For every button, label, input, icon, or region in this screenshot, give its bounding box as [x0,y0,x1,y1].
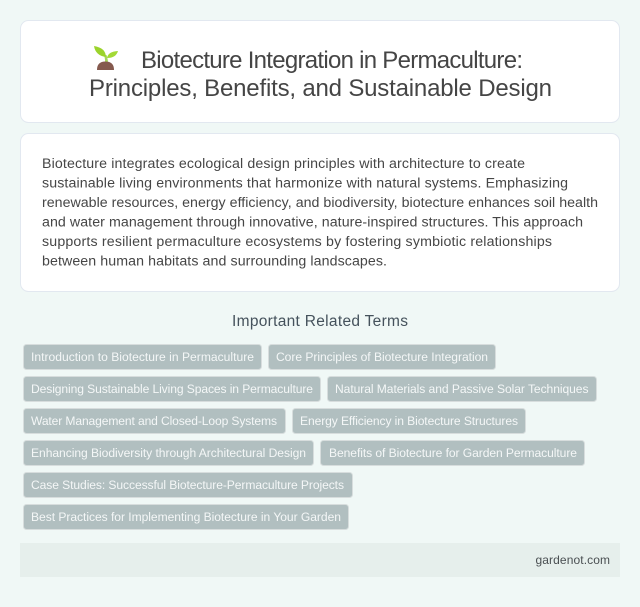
tag [24,504,348,530]
tag [24,344,262,370]
tag: Water Management and Closed-Loop Systems [31,414,277,428]
description text: sustainable living environments that harmonize with natural systems. Emphasizing [42,175,568,191]
panel: title card [20,20,620,122]
title: Biotecture Integration in Permaculture: [141,47,523,74]
footer [20,543,620,577]
tag: Energy Efficiency in Biotecture Structures [300,414,518,428]
tag [328,376,596,402]
footer source text: gardenot.com [536,553,610,567]
tag [24,376,320,402]
related terms tags [24,344,596,530]
description text: and water management through innovative, nature-inspired structures. This approach [42,214,583,230]
tag: Core Principles of Biotecture Integration [276,350,488,364]
tag: Designing Sustainable Living Spaces in Permaculture [31,382,313,396]
tag [292,408,526,434]
description text [42,156,598,269]
tag: Benefits of Biotecture for Garden Permaculture [329,446,577,460]
tag [268,344,496,370]
tag: Introduction to Biotecture in Permaculture [31,350,254,364]
icon: seedling [94,46,118,70]
tag: Natural Materials and Passive Solar Techniques [335,382,588,396]
description text: renewable resources, energy efficiency, and biodiversity, biotecture enhances soil health [42,195,598,211]
tag [24,408,286,434]
tag [24,472,352,498]
tag: Enhancing Biodiversity through Architectural Design [31,446,306,460]
tag [320,440,584,466]
tag: Case Studies: Successful Biotecture-Permaculture Projects [31,478,344,492]
tag: Best Practices for Implementing Biotecture in Your Garden [31,510,341,524]
panel: description [20,134,620,292]
tag [24,440,314,466]
description text: supports resilient permaculture ecosystems by fostering symbiotic relationships [42,234,552,250]
description text: Biotecture integrates ecological design principles with architecture to create [42,156,525,172]
title [89,47,552,102]
description text: between human habitats and surrounding landscapes. [42,253,387,269]
title: Principles, Benefits, and Sustainable Design [89,75,552,102]
heading: related terms: Important Related Terms [232,313,408,330]
